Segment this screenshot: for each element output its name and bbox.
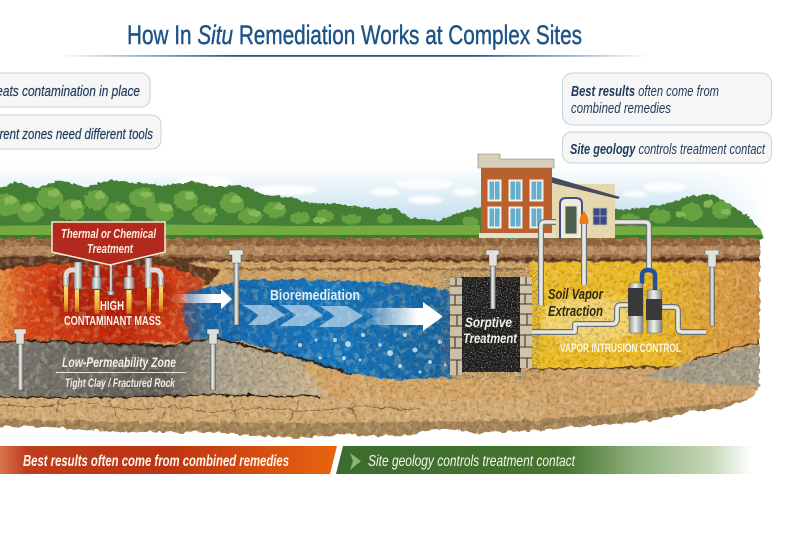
parapet (478, 154, 554, 168)
label: low-permeability zone: Tight Clay / Fractured Rock (65, 378, 175, 390)
label: sorptive treatment: Sorptive (465, 314, 512, 330)
building (478, 154, 620, 238)
footer bar: combined remedies: Best results often come from combined remedies (23, 453, 289, 470)
grass strip (0, 224, 764, 240)
label: soil vapor extraction: Extraction (548, 304, 603, 320)
deep soil (0, 390, 760, 440)
footer bar: site geology (336, 446, 752, 474)
wells (14, 250, 719, 390)
footer bar: site geology: Site geology controls treatment contact (368, 453, 575, 470)
base subsoil (0, 262, 760, 439)
zone: high contaminant mass (0, 264, 205, 344)
label: sorptive treatment (463, 314, 518, 346)
callout: best results: Best results often come from (571, 84, 719, 100)
title: How In Situ Remediation Works at Complex Sites (127, 20, 582, 50)
arrow: flow into sorptive wall (358, 302, 443, 331)
gray lens right (640, 344, 760, 386)
label: soil vapor extraction (548, 287, 604, 320)
callout: best results: combined remedies (571, 101, 671, 117)
label: bioremediation: Bioremediation (270, 287, 360, 304)
callout: best results (562, 73, 772, 125)
chevrons: groundwater flow (243, 305, 363, 327)
label: high contaminant mass: HIGH (100, 298, 124, 313)
stone wall right (520, 277, 532, 368)
yellow vapor zone (530, 262, 760, 369)
banner: thermal or chemical treatment (52, 222, 165, 265)
banner: thermal or chemical treatment: Treatment (87, 241, 133, 256)
brick block (481, 168, 552, 236)
stone wall left (450, 278, 462, 375)
windows (488, 180, 542, 228)
flame columns (64, 285, 163, 314)
label: vapor intrusion control: VAPOR INTRUSION CONTROL (560, 343, 681, 355)
tan band (200, 262, 530, 286)
dark mound over plume (0, 254, 220, 285)
pebble texture dark (0, 238, 762, 438)
vapor extraction piping (532, 211, 706, 333)
footer bar: combined remedies (0, 446, 337, 474)
annex (552, 177, 620, 238)
thermal injection pipes (63, 258, 164, 314)
flare flame (580, 211, 588, 224)
label: low-permeability zone (56, 354, 186, 390)
tan under plume (301, 363, 340, 398)
soil cross-section (0, 238, 762, 440)
left treatment vessel (628, 283, 643, 333)
icon: chevron (350, 453, 361, 470)
label: high contaminant mass: CONTAMINANT MASS (64, 313, 161, 328)
zone: low permeability (0, 338, 340, 396)
callout: treats contamination in place (0, 73, 150, 107)
pebble texture light (0, 238, 762, 438)
topsoil band (0, 238, 760, 262)
landscape sky (0, 165, 766, 235)
arrow: flow from source to plume (170, 289, 232, 309)
label: sorptive treatment: Treatment (463, 330, 518, 346)
blue U connector (642, 270, 655, 290)
callout: site geology (562, 132, 772, 163)
tree line (0, 180, 762, 232)
cracked lower layer (0, 398, 540, 422)
banner: thermal or chemical treatment: Thermal or Chemical (61, 226, 156, 241)
title underline (60, 55, 650, 57)
callout: different zones (0, 115, 161, 149)
sorptive treatment wall (450, 277, 532, 375)
label: soil vapor extraction: Soil Vapor (548, 287, 604, 303)
label: low-permeability zone: Low-Permeability Zone (62, 354, 176, 370)
label: high contaminant mass (64, 298, 161, 328)
zone: bioremediation plume (182, 279, 452, 380)
bubbles in plume (298, 333, 446, 374)
callout: site geology: Site geology controls treatment contact (570, 142, 766, 158)
right treatment vessel (646, 290, 662, 333)
